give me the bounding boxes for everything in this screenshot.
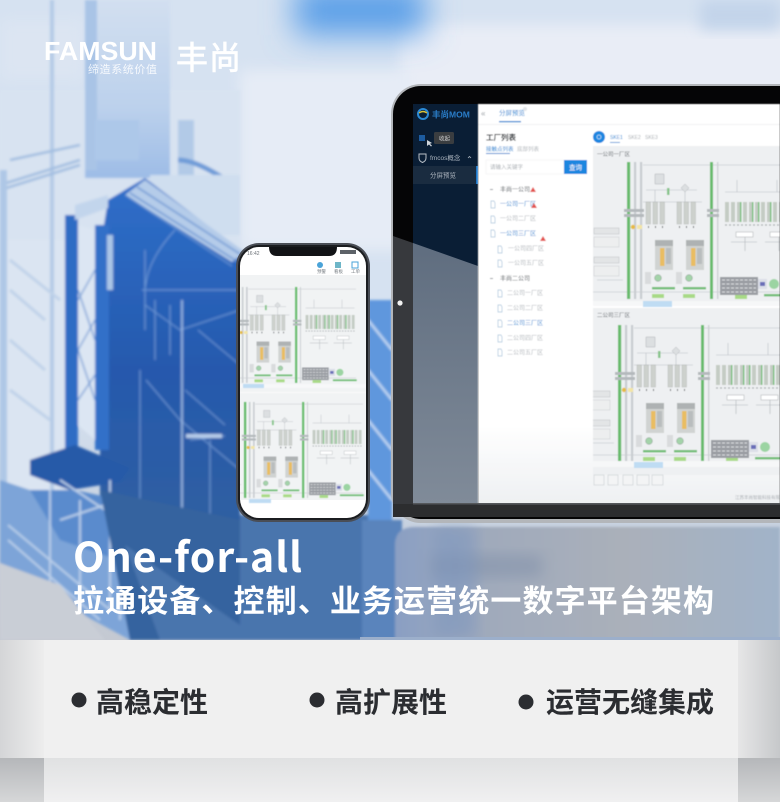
lower blue mass xyxy=(100,490,242,640)
feature list xyxy=(72,687,714,718)
diagram tabs xyxy=(593,131,658,143)
headline xyxy=(73,524,714,619)
logo: FAMSUN 丰尚 xyxy=(44,38,241,76)
blue structure xyxy=(100,178,240,560)
left platform and lattice xyxy=(0,480,130,640)
tablet sidebar: 丰尚MOM xyxy=(432,110,470,120)
tablet sidebar: 分屏预览 xyxy=(430,170,456,180)
tablet content area: « xyxy=(481,109,486,118)
plant diagrams: 一公司一厂区 xyxy=(597,151,631,158)
plant diagrams: 二公司三厂区 xyxy=(597,312,631,319)
factory list panel: 丰尚一公司 xyxy=(500,186,530,194)
phone notch xyxy=(269,247,337,256)
factory list panel: 丰尚二公司 xyxy=(500,274,530,282)
phone header icons: 工单 xyxy=(351,268,360,275)
factory list panel: 二公司四厂区 xyxy=(507,335,543,342)
factory list panel: 查询 xyxy=(569,162,582,172)
pale left zone xyxy=(64,158,220,240)
tablet reflection xyxy=(395,527,780,640)
tablet sidebar: fmcos概念 xyxy=(430,153,461,162)
phone mockup: 16:42 xyxy=(247,251,260,257)
logo: FAMSUN 丰尚: 缔造系统价值 xyxy=(88,62,157,76)
tablet content area: 分屏预览 xyxy=(499,108,526,117)
factory list panel: 底部列表 xyxy=(517,145,540,153)
phone header icons: 预警 xyxy=(317,268,326,275)
bottom panel: light feature band xyxy=(0,640,780,802)
factory list panel: 二公司五厂区 xyxy=(507,350,543,356)
factory list panel: 二公司一厂区 xyxy=(507,290,543,297)
factory list panel: 接触点列表 xyxy=(486,145,514,153)
diagram tabs: SKE2 xyxy=(628,135,641,141)
logo: FAMSUN 丰尚: 丰尚 xyxy=(176,40,241,76)
tablet camera xyxy=(397,300,403,306)
factory list panel: 一公司三厂区 xyxy=(500,230,536,238)
pale silo xyxy=(85,0,170,178)
diagram tabs: SKE1 xyxy=(610,135,623,141)
factory list panel: 一公司五厂区 xyxy=(508,260,544,267)
factory list panel: 一公司二厂区 xyxy=(500,216,536,222)
factory list panel: 一公司四厂区 xyxy=(508,246,544,252)
phone plant diagrams xyxy=(240,286,364,504)
phone header icons xyxy=(317,262,360,275)
tablet content area xyxy=(478,104,780,504)
bottom-left pale corner xyxy=(0,562,86,640)
plant diagrams xyxy=(584,151,780,485)
tablet sidebar xyxy=(413,104,478,504)
feature: seamless operations integration: 运营无缝集成 xyxy=(546,687,714,718)
factory list panel: 二公司二厂区 xyxy=(507,305,543,312)
background: industrial plant photo xyxy=(0,0,780,640)
headline: One-for-all xyxy=(73,524,302,584)
phone header icons: 看板 xyxy=(334,268,343,275)
logo: FAMSUN 丰尚: FAMSUN xyxy=(44,38,157,66)
feature: high scalability: 高扩展性 xyxy=(335,687,447,718)
factory list panel xyxy=(486,132,587,356)
tablet mockup xyxy=(391,84,780,523)
feature: high stability: 高稳定性 xyxy=(96,687,208,718)
subheadline: 拉通设备、控制、业务运营统一数字平台架构 xyxy=(73,584,714,619)
factory list panel: 一公司一厂区 xyxy=(500,201,536,208)
factory list panel: 请输入关键字 xyxy=(490,163,524,171)
factory list panel: 工厂列表 xyxy=(486,132,516,142)
blue strip between phone and tablet xyxy=(240,515,370,640)
phone mockup xyxy=(236,243,370,522)
tablet sidebar: 收起 xyxy=(439,134,451,142)
factory list panel: 二公司三厂区 xyxy=(507,320,543,327)
diagram tabs: SKE3 xyxy=(645,135,658,141)
